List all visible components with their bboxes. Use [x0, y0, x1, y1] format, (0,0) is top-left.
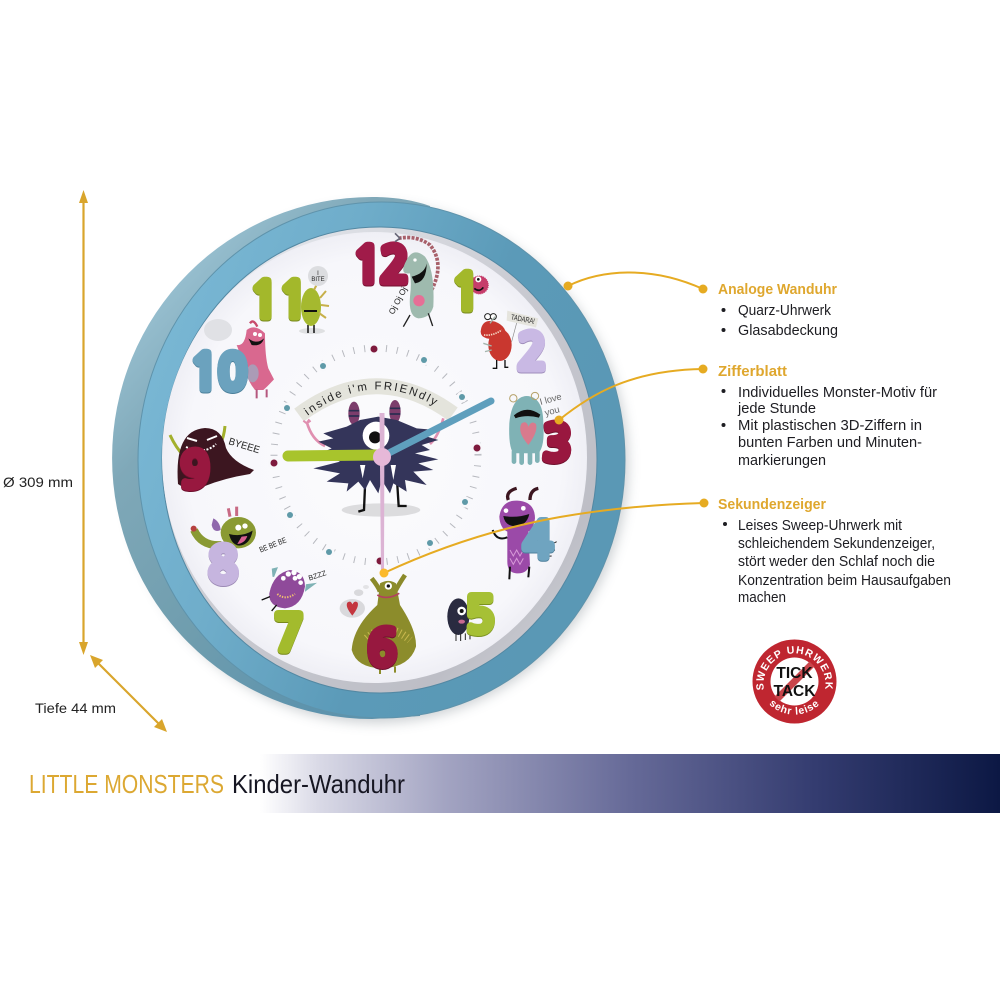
dimension arrow: depth [90, 655, 167, 732]
numeral 8 and monster: BE BE BE [258, 536, 288, 555]
numeral 9 and monster: BYEEE [227, 436, 261, 456]
clock dial [162, 232, 587, 683]
thought bubble with heart [340, 585, 369, 618]
numeral 1 and monster: 1 [451, 270, 481, 317]
minute tick marks [274, 348, 478, 562]
numeral 5 and monster [447, 593, 495, 641]
speech bubble: I bite: I [317, 271, 319, 277]
numeral 10 and monster: 10 [190, 350, 246, 397]
callout: Sekundenzeiger: Konzentration beim Hausaufgaben [738, 573, 951, 589]
second hand [380, 413, 384, 572]
clock shadow [124, 205, 628, 723]
numeral 12 and monster: 12 [353, 243, 407, 290]
numeral 4 and monster [493, 488, 557, 579]
dimension label: depth: Tiefe 44 mm [35, 700, 116, 716]
numeral 9 and monster [170, 426, 261, 495]
numeral 3 and monster: you [544, 404, 561, 418]
minute hand [385, 401, 491, 455]
clock front rim [138, 202, 625, 718]
clock back frame [112, 197, 430, 719]
callout line: second hand [380, 498, 708, 578]
callout line: wall clock [564, 272, 708, 294]
numeral 4 and monster: 4 [523, 518, 553, 565]
numeral 5 and monster: 5 [465, 593, 495, 640]
hour hand [288, 455, 378, 456]
numeral 7 and monster: BZZZ [307, 568, 328, 583]
numeral 12 and monster: Oj Oj Oj [386, 285, 409, 316]
wall clock [112, 197, 634, 729]
numeral 11 and monster: 11 [250, 278, 308, 325]
numeral 3 and monster [509, 391, 572, 468]
callout: Sekundenzeiger [718, 497, 951, 606]
gradient footer band [260, 754, 1000, 813]
badge: sweep movement: TACK [774, 683, 816, 700]
numeral 11 and monster [250, 266, 329, 334]
numeral 2 and monster [481, 311, 547, 377]
callout: Analoge Wanduhr: Glasabdeckung [738, 323, 838, 339]
badge: sweep movement: SWEEP UHRWERK [756, 646, 833, 690]
callout: Analoge Wanduhr [718, 282, 838, 339]
title [29, 769, 405, 799]
callout: Zifferblatt: bunten Farben und Minuten- [738, 435, 922, 451]
minute dots [270, 346, 480, 564]
callout: Analoge Wanduhr: Quarz-Uhrwerk [738, 303, 832, 319]
title: Kinder-Wanduhr [232, 769, 405, 799]
banner: inside i'm friendly: inside i'm FRIENdly [304, 382, 438, 416]
badge: sweep movement: sehr leise [770, 700, 818, 715]
speech bubble: I bite [308, 266, 328, 286]
numeral 7 and monster: 7 [274, 611, 304, 658]
callout: Analoge Wanduhr: Analoge Wanduhr [718, 282, 837, 298]
callout: Zifferblatt: Zifferblatt [718, 364, 787, 380]
numeral 6 and monster: 6 [367, 626, 397, 673]
dimension arrow: diameter [79, 190, 88, 655]
numeral 3 and monster: I love [539, 391, 563, 407]
numeral 2 and monster: TADARA! [510, 312, 536, 326]
callout: Zifferblatt: markierungen [738, 453, 826, 469]
speech bubble: I bite: BITE [311, 277, 325, 283]
numeral 7 and monster [262, 568, 328, 658]
centre monster [303, 400, 443, 517]
callout: Zifferblatt: Individuelles Monster-Motiv für [738, 385, 937, 401]
badge: sweep movement: TICK [776, 665, 813, 682]
numeral 8 and monster [191, 507, 288, 590]
numeral 12 and monster [353, 233, 438, 327]
callout: Zifferblatt: jede Stunde [737, 401, 816, 417]
numeral 9 and monster: 9 [180, 448, 210, 495]
callout line: dial [554, 364, 708, 424]
dimension label: diameter: Ø 309 mm [3, 474, 73, 490]
numeral 8 and monster: 8 [208, 543, 238, 590]
numeral 2 and monster: 2 [517, 330, 547, 377]
callout: Sekundenzeiger: Leises Sweep-Uhrwerk mit [738, 518, 902, 534]
badge: sweep movement [752, 640, 836, 724]
callout: Zifferblatt: Mit plastischen 3D-Ziffern in [738, 418, 922, 434]
callout: Sekundenzeiger: schleichendem Sekundenzeiger, [738, 536, 935, 552]
clock hub [373, 448, 391, 466]
numeral 10 and monster [190, 319, 274, 398]
numeral 6 and monster [340, 575, 416, 674]
callout: Sekundenzeiger: stört weder den Schlaf noch die [738, 554, 935, 570]
callout: Sekundenzeiger: Sekundenzeiger [718, 497, 826, 513]
inner bevel [162, 227, 597, 693]
callout: Sekundenzeiger: machen [738, 590, 786, 606]
numeral 3 and monster: 3 [542, 421, 572, 468]
title: LITTLE MONSTERS [29, 769, 224, 799]
callout: Zifferblatt [718, 364, 937, 469]
